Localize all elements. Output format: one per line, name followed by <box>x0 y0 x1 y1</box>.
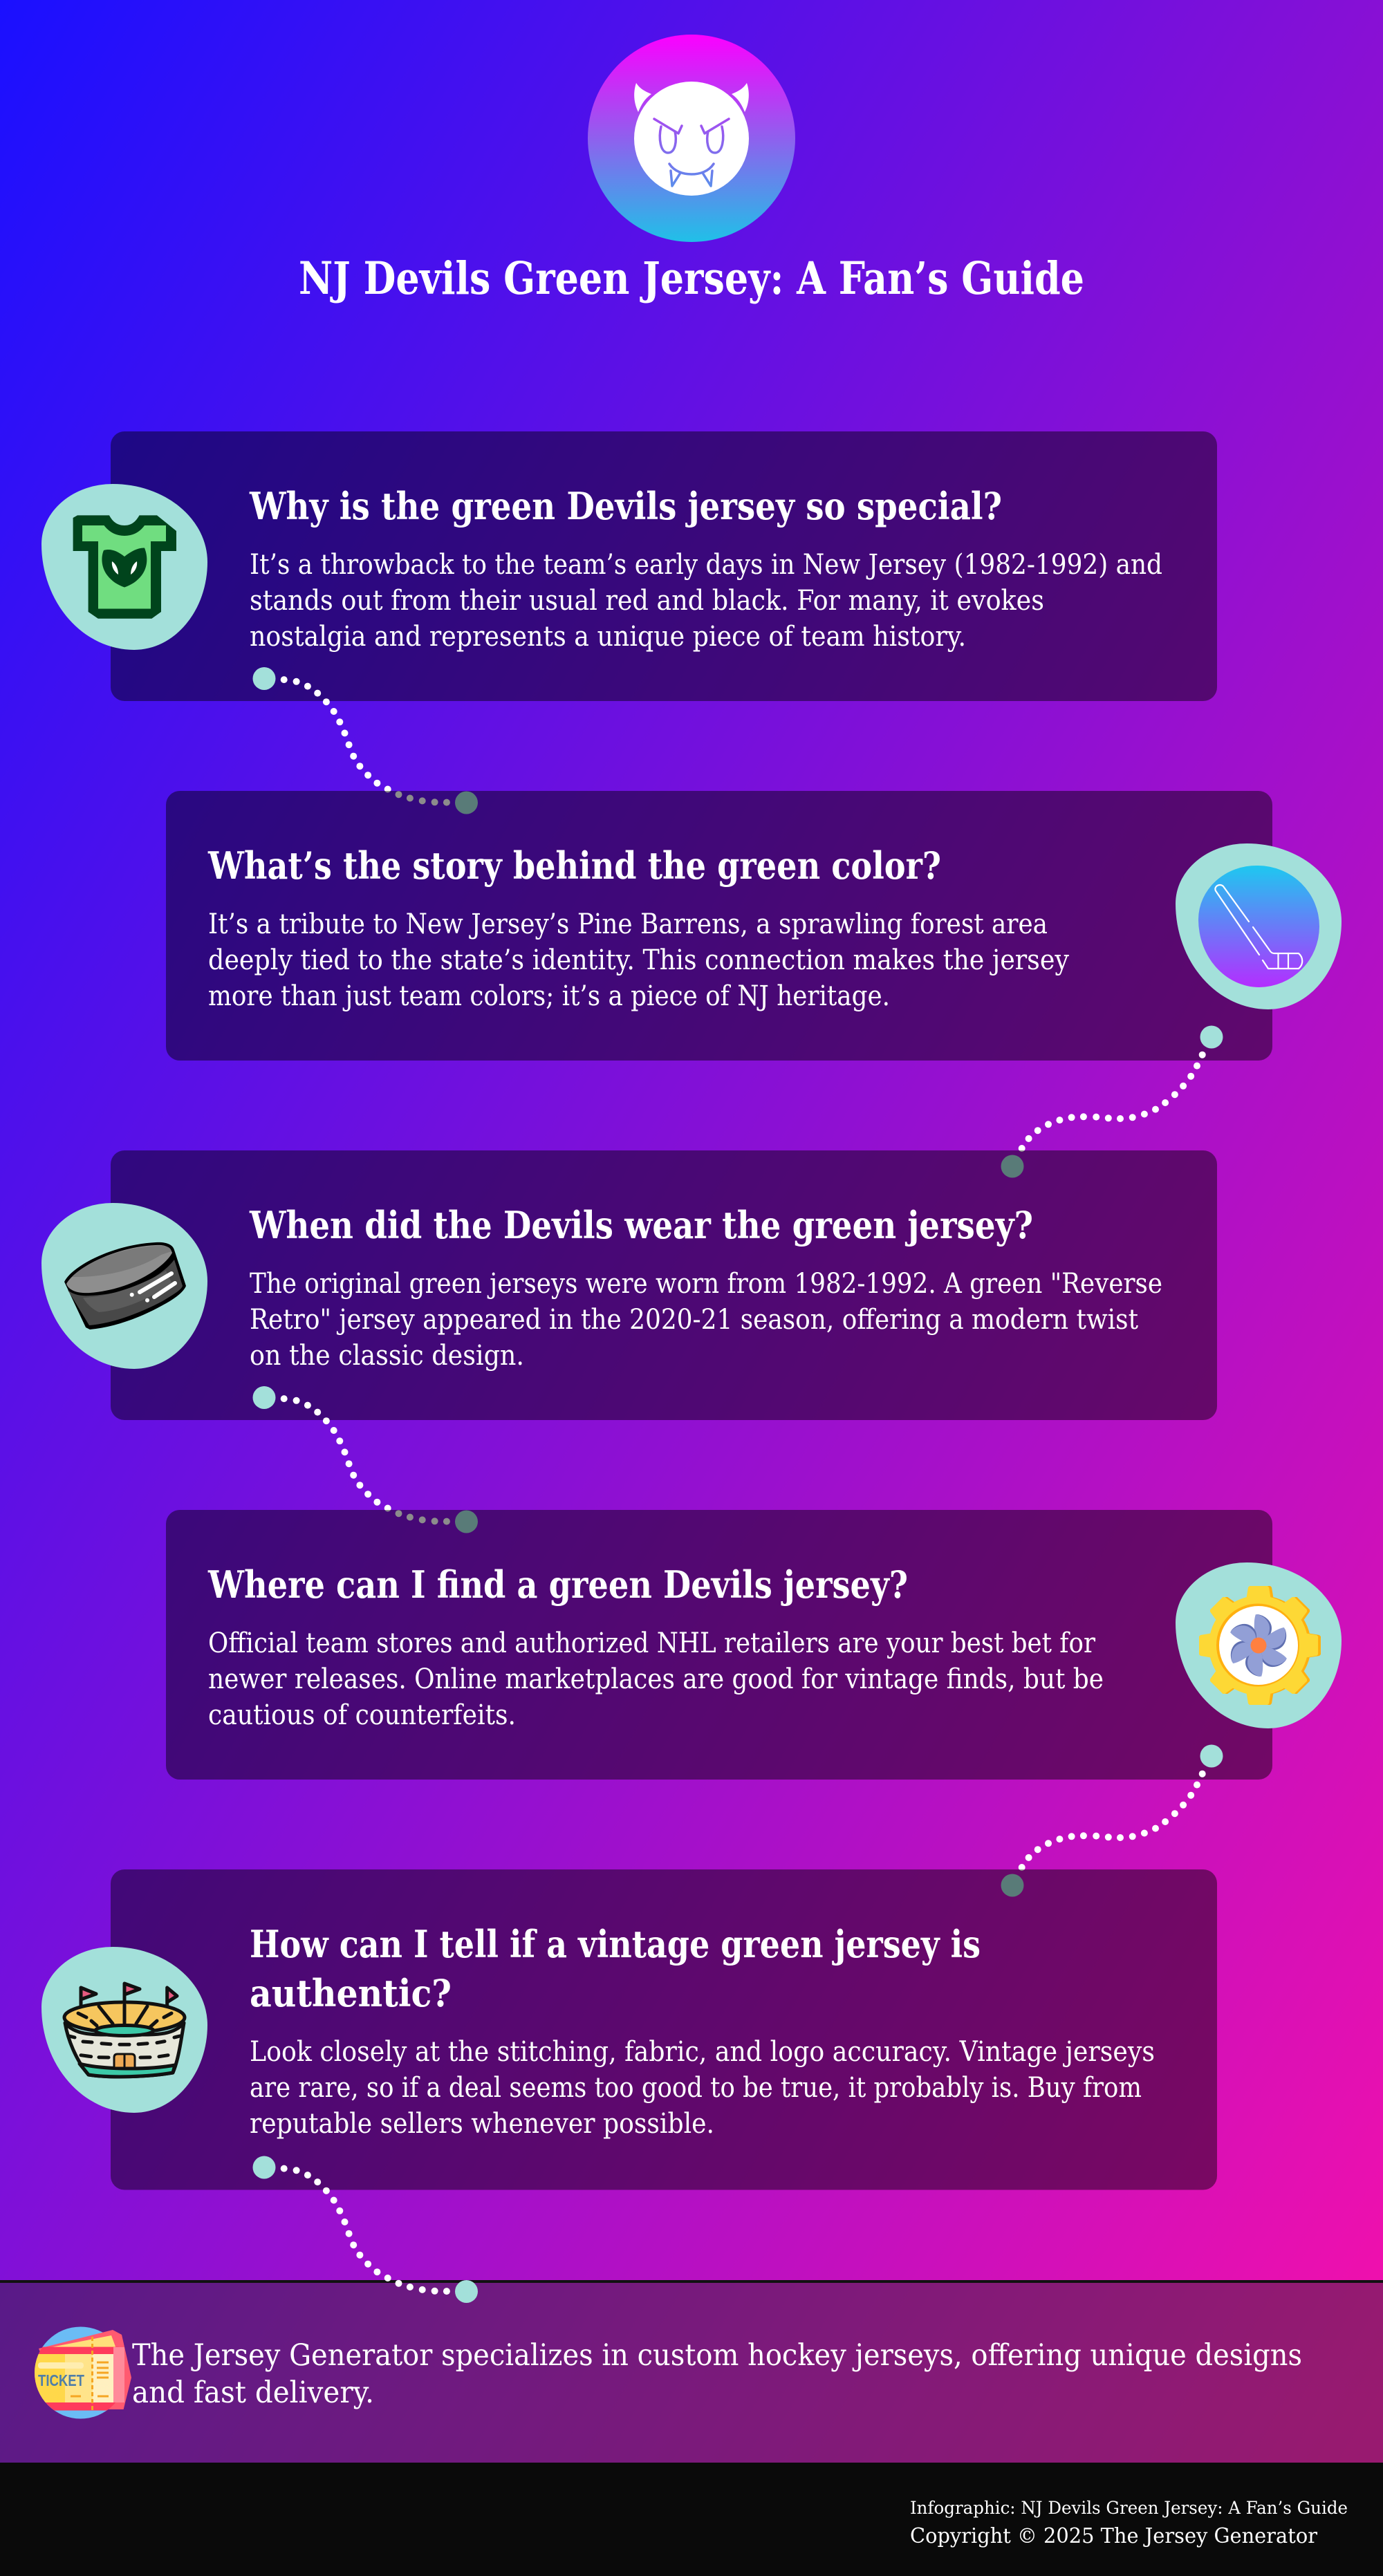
heading: where to find: Where can I find a green Devils jersey? <box>207 1562 908 1607</box>
text block: why special: stands out from their usual red and black. For many, it evokes <box>250 585 1044 617</box>
text block: where to find <box>208 1627 1104 1731</box>
text block: when worn <box>250 1268 1162 1372</box>
text block: when worn: on the classic design. <box>250 1340 524 1372</box>
heading: story: What’s the story behind the green color? <box>207 843 941 888</box>
icon: gear with fan <box>1176 1562 1342 1728</box>
panel: authenticity <box>41 1869 1217 2190</box>
panel: why special <box>41 431 1217 701</box>
footer text: infographic credit: Infographic: NJ Devils Green Jersey: A Fan’s Guide <box>910 2498 1348 2518</box>
text block: story <box>208 908 1069 1012</box>
connector: panel 4 to panel 5 <box>1001 1745 1223 1897</box>
icon: hockey puck <box>41 1203 207 1369</box>
logo: devil face <box>588 35 795 242</box>
text block: where to find: Official team stores and authorized NHL retailers are your best bet for <box>208 1627 1096 1659</box>
text block: story: deeply tied to the state’s identity. This connection makes the jersey <box>208 944 1069 976</box>
text block: authenticity: are rare, so if a deal seems too good to be true, it probably is. Buy from <box>250 2072 1142 2104</box>
bottom band <box>0 2280 1383 2463</box>
text block: authenticity: Look closely at the stitching, fabric, and logo accuracy. Vintage jerseys <box>250 2036 1155 2068</box>
text block: story: more than just team colors; it’s a piece of NJ heritage. <box>208 980 890 1012</box>
connector: panel 1 to panel 2 <box>253 667 478 814</box>
heading: when worn: When did the Devils wear the green jersey? <box>249 1203 1033 1247</box>
text block: where to find: cautious of counterfeits. <box>208 1699 516 1731</box>
connector: panel 2 to panel 3 <box>1001 1026 1223 1178</box>
text block: authenticity <box>250 2036 1155 2140</box>
title: NJ Devils Green Jersey: A Fan’s Guide <box>299 252 1084 305</box>
text block: authenticity: reputable sellers whenever possible. <box>250 2108 714 2140</box>
heading: authenticity: authentic? <box>250 1971 452 2015</box>
icon: stadium <box>41 1947 207 2113</box>
text block: company statement: and fast delivery. <box>132 2376 374 2410</box>
text block: where to find: newer releases. Online marketplaces are good for vintage finds, but be <box>208 1663 1104 1695</box>
footer <box>0 2463 1383 2576</box>
text block: why special: nostalgia and represents a unique piece of team history. <box>250 621 966 653</box>
icon: hockey stick <box>1176 843 1342 1009</box>
heading: authenticity: How can I tell if a vintage green jersey is <box>250 1922 981 1966</box>
panel: where to find <box>166 1510 1342 1780</box>
heading: authenticity <box>250 1922 981 2015</box>
text block: story: It’s a tribute to New Jersey’s Pine Barrens, a sprawling forest area <box>208 908 1048 940</box>
footer text: copyright: Copyright © 2025 The Jersey Generator <box>910 2524 1318 2548</box>
text block: company statement: The Jersey Generator specializes in custom hockey jerseys, offering unique designs <box>132 2338 1302 2373</box>
heading: why special: Why is the green Devils jersey so special? <box>249 484 1002 528</box>
text block: when worn: The original green jerseys were worn from 1982-1992. A green "Reverse <box>250 1268 1162 1300</box>
icon: tickets: TICKET <box>38 2371 84 2389</box>
icon: green t-shirt <box>41 484 207 650</box>
panel: story behind the color <box>166 791 1342 1061</box>
text block: why special: It’s a throwback to the team’s early days in New Jersey (1982-1992) and <box>250 549 1162 581</box>
text block: company statement <box>132 2338 1302 2410</box>
panel: when worn <box>41 1150 1217 1420</box>
text block: when worn: Retro" jersey appeared in the 2020-21 season, offering a modern twist <box>250 1304 1138 1336</box>
text block: why special <box>250 549 1162 653</box>
connector: panel 3 to panel 4 <box>253 1386 478 1533</box>
connector: panel 5 to bottom band <box>253 2156 478 2303</box>
icon: tickets <box>28 2327 131 2418</box>
